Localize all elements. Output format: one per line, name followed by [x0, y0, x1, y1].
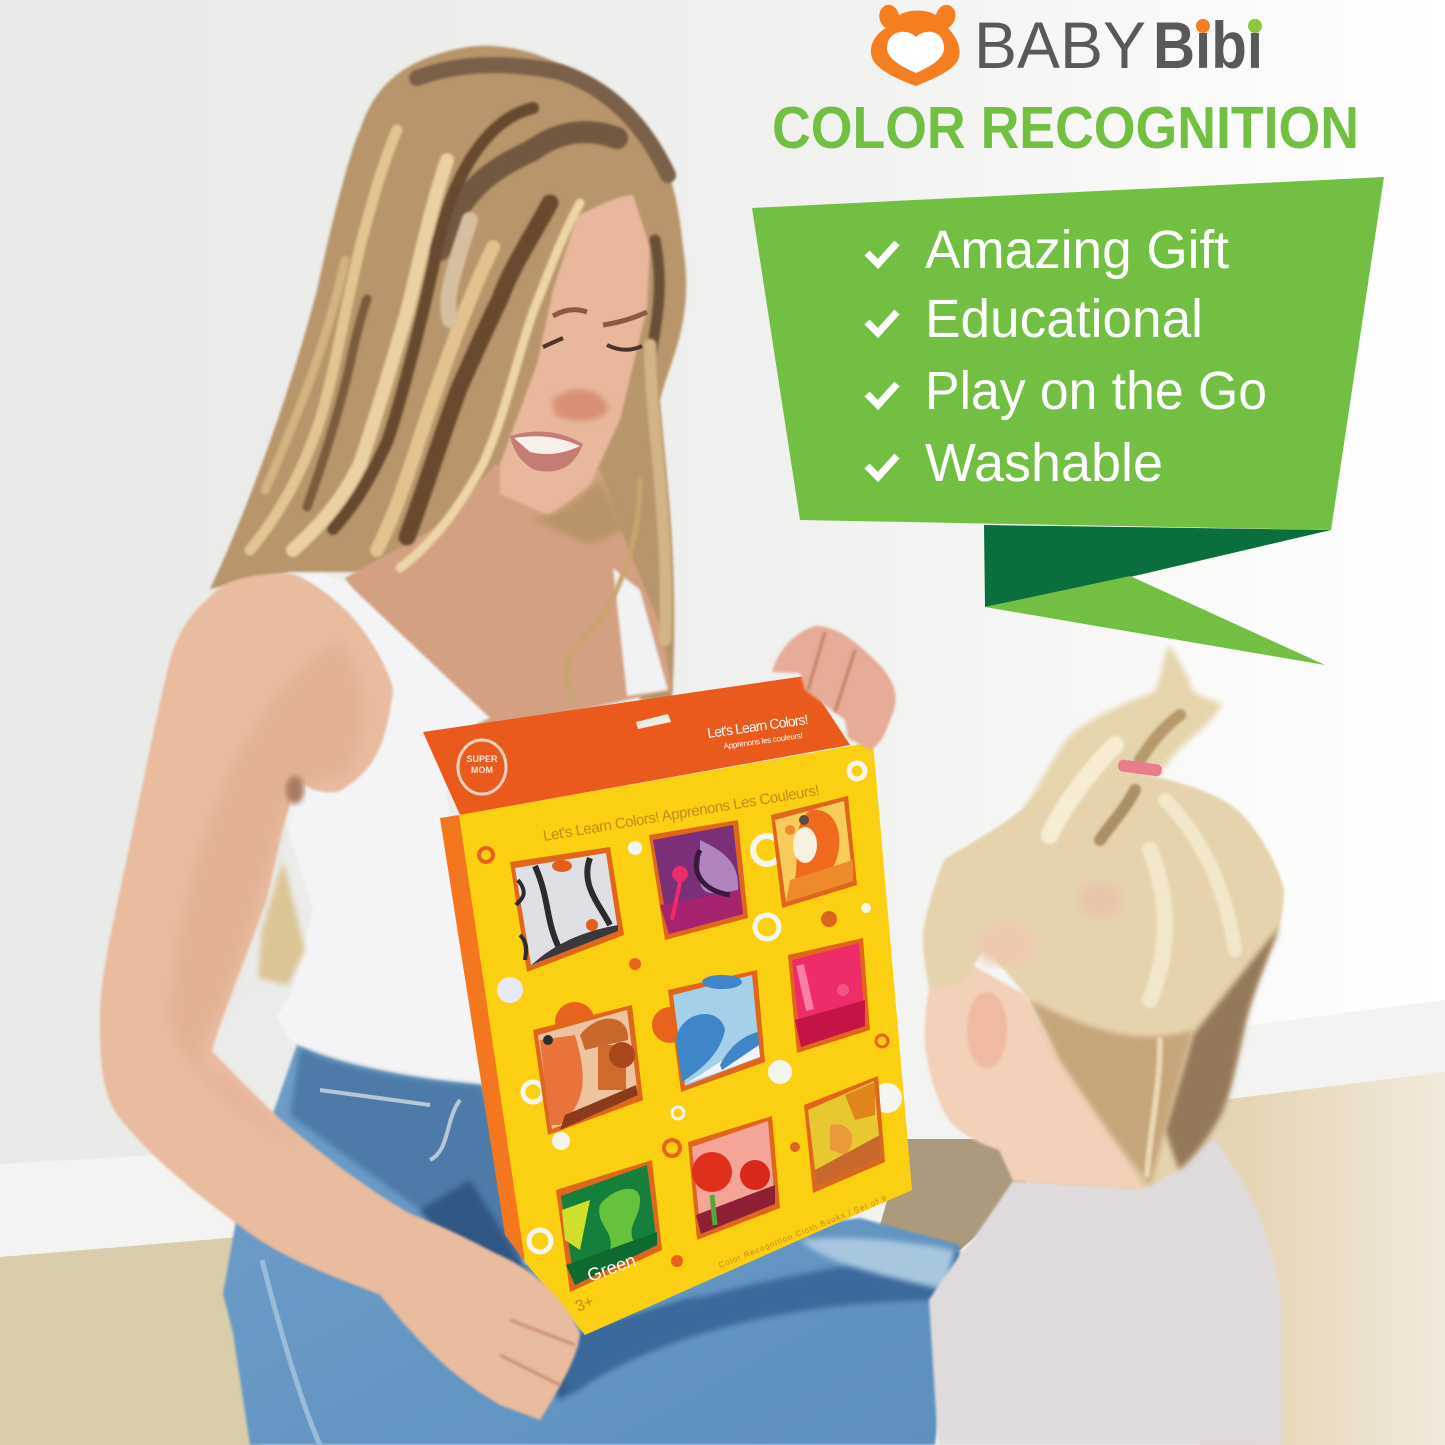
- wordmark: Bibi: [1153, 8, 1263, 82]
- item: washable: Washable: [925, 433, 1163, 493]
- title: COLOR RECOGNITION: [772, 95, 1359, 161]
- photo: woman: [100, 46, 960, 1445]
- shirt: [929, 1139, 1282, 1445]
- tile: broccoli: [556, 1160, 662, 1292]
- hair streaks: [250, 65, 668, 700]
- green banner: [752, 177, 1384, 665]
- top knot: [1024, 646, 1222, 807]
- tile: ladybug: [688, 1116, 780, 1240]
- item: educational: Educational: [925, 289, 1203, 349]
- armpit shadow: [286, 776, 304, 804]
- header title: Let's Learn Colors!: [706, 711, 809, 741]
- smile: [510, 432, 583, 472]
- photo: product box: Apprenons les couleurs!: [723, 731, 803, 751]
- icon: check: [867, 312, 897, 333]
- ear: [967, 992, 1007, 1068]
- icon: bear heart: [871, 5, 960, 86]
- tile: purple bunny: [649, 820, 748, 940]
- nose shading: [552, 390, 608, 421]
- item: play on the go: Play on the Go: [925, 361, 1267, 421]
- ribbon fold dark: [984, 525, 1331, 607]
- hair tie: [1117, 759, 1163, 777]
- icon: check: [867, 456, 897, 477]
- box footer text: Color Recognition Cloth Books / Set of 9: [717, 1194, 888, 1270]
- logo: [871, 5, 1263, 86]
- tile: flamingo: [788, 938, 870, 1053]
- tile: penguin: [510, 847, 624, 972]
- hair back mass: [210, 46, 686, 700]
- photo: product box: [423, 676, 912, 1335]
- wordmark: BABY: [974, 8, 1146, 82]
- yellow panel: [459, 742, 912, 1335]
- hair streaks: [1050, 715, 1235, 1175]
- face: [500, 195, 650, 516]
- right strap: [613, 568, 668, 696]
- panel title: Let's Learn Colors! Apprenons Les Couleurs!: [542, 782, 821, 845]
- arm: [100, 574, 420, 1295]
- photo: hands over box: [380, 626, 896, 1420]
- hang hole: [636, 714, 671, 729]
- jeans: [223, 1045, 960, 1445]
- arm inner shading: [170, 640, 363, 1150]
- box age label: 3+: [573, 1293, 596, 1316]
- hair dark underside: [1165, 926, 1280, 1170]
- icon: check: [867, 243, 897, 264]
- tile: fox: [771, 796, 857, 908]
- wordmark: [974, 8, 1263, 82]
- banner panel: [752, 177, 1384, 530]
- head skin: [925, 960, 1143, 1189]
- tile: broccoli: Green: [585, 1250, 638, 1286]
- hand on box top: [772, 626, 896, 750]
- stray blond hair behind arm: [258, 860, 305, 985]
- under chin shadow: [530, 480, 625, 545]
- eyes and brows: [553, 310, 647, 325]
- blond hair: [923, 768, 1284, 1186]
- logo seal: MOM: [471, 765, 493, 775]
- item: amazing gift: Amazing Gift: [925, 220, 1229, 280]
- neck and chest: [345, 465, 672, 730]
- tile: whale: [668, 970, 765, 1092]
- icon: check: [867, 384, 897, 405]
- tank top: [277, 574, 490, 1084]
- logo seal: [458, 740, 506, 794]
- hair tan lower: [1030, 1000, 1193, 1186]
- pink scalp patches: [1078, 882, 1122, 918]
- side edge: [440, 815, 530, 1268]
- photo: toddler: [923, 646, 1284, 1445]
- tile: bird: [804, 1076, 885, 1193]
- tile: mushroom: [533, 1005, 643, 1135]
- ribbon tail: [985, 576, 1325, 665]
- orange header: [423, 676, 850, 815]
- jeans upper shade: [290, 1048, 525, 1275]
- logo seal: SUPER: [466, 754, 498, 764]
- box dots: [479, 763, 902, 1267]
- hand on box bottom: [380, 1215, 580, 1420]
